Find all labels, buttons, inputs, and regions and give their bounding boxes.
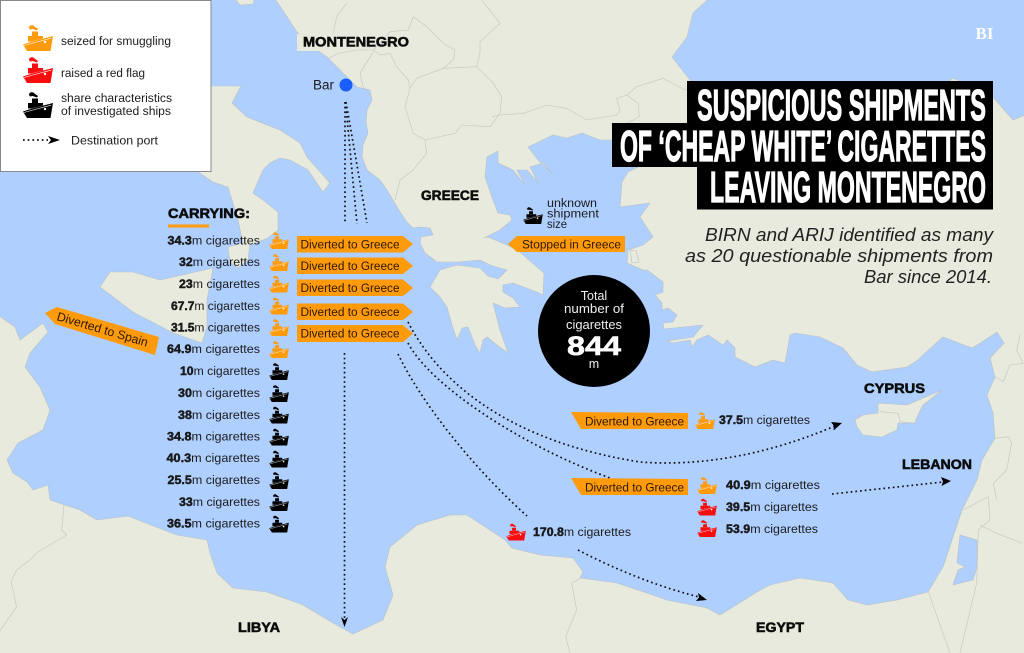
tag: stopped in Greece: Stopped in Greece	[522, 238, 621, 252]
arrow: to Lebanon	[832, 477, 951, 494]
land: Sicily	[100, 268, 213, 343]
total callout circle: Total	[581, 289, 607, 303]
legend: destination port arrow: Destination port	[71, 134, 159, 148]
lake: Dead Sea region	[953, 535, 977, 585]
list of cigarette quantities: 34.3m cigarettes	[168, 234, 260, 248]
icons: orange ships in list	[269, 232, 289, 358]
legend: seized for smuggling: seized for smuggling	[61, 34, 171, 48]
shipment: red ship near Libya: 170.8m cigarettes	[533, 525, 631, 539]
note: unknown shipment size	[523, 196, 600, 231]
total callout circle: 844	[567, 331, 621, 361]
total callout circle: cigarettes	[566, 318, 622, 332]
total callout circle	[538, 275, 650, 387]
country labels: GREECE	[421, 188, 479, 203]
list of cigarette quantities: 31.5m cigarettes	[171, 320, 260, 334]
land patch behind Montenegro label	[297, 34, 357, 51]
port marker: Bar: Bar	[313, 78, 334, 92]
list of cigarette quantities: 38m cigarettes	[178, 408, 260, 422]
land: Italy fragment at top	[232, 0, 256, 5]
tag: diverted to Spain: Diverted to Spain	[55, 309, 150, 350]
legend: seized for smuggling	[23, 25, 171, 51]
arrow: to Egypt	[578, 550, 707, 601]
note: unknown shipment size: unknown	[547, 196, 597, 210]
subtitle: BIRN and ARIJ identified as many	[705, 225, 994, 245]
country labels: LIBYA	[238, 620, 280, 635]
shipment group: to Lebanon	[571, 477, 820, 537]
tags: diverted to Greece stack: Diverted to Greece	[300, 326, 400, 340]
legend: raised a red flag: raised a red flag	[61, 66, 145, 80]
legend: share characteristics	[23, 91, 172, 118]
shipment group: to Lebanon: Diverted to Greece	[585, 480, 684, 494]
list of cigarette quantities	[166, 234, 260, 530]
list of cigarette quantities: 23m cigarettes	[179, 277, 260, 291]
country labels: LEBANON	[902, 457, 972, 472]
list of cigarette quantities: 25.5m cigarettes	[168, 473, 260, 487]
shipment group: to Cyprus: Diverted to Greece	[585, 414, 684, 428]
shipment group: to Lebanon: 53.9m cigarettes	[726, 522, 818, 536]
shipment group: to Cyprus: 37.5m cigarettes	[719, 413, 810, 427]
list of cigarette quantities: 34.8m cigarettes	[167, 430, 260, 444]
list of cigarette quantities: 30m cigarettes	[178, 386, 260, 400]
legend: destination port arrow	[23, 134, 159, 148]
list of cigarette quantities: 67.7m cigarettes	[171, 299, 260, 313]
list of cigarette quantities: 36.5m cigarettes	[167, 516, 260, 530]
legend: share characteristics: of investigated ships	[61, 104, 171, 118]
legend panel	[0, 0, 211, 172]
list of cigarette quantities: 33m cigarettes	[179, 495, 260, 509]
list of cigarette quantities: 64.9m cigarettes	[167, 342, 260, 356]
subtitle: Bar since 2014.	[864, 267, 992, 287]
title block	[612, 81, 993, 212]
carrying heading: CARRYING:	[168, 206, 250, 221]
shipment group: to Cyprus	[571, 412, 810, 429]
tag: diverted to Spain	[45, 307, 159, 355]
country borders: Middle East	[880, 335, 1023, 500]
list of cigarette quantities: 40.3m cigarettes	[166, 451, 260, 465]
country labels: MONTENEGRO	[303, 34, 409, 50]
tags: diverted to Greece stack	[297, 236, 413, 342]
land: Italy	[198, 86, 330, 268]
country labels: EGYPT	[756, 620, 805, 635]
route: to red ship	[398, 354, 527, 516]
port marker: Bar	[313, 78, 352, 92]
land: Cyprus	[855, 390, 942, 437]
dotted routes	[341, 102, 951, 627]
note: unknown shipment size: size	[547, 217, 567, 231]
legend: raised a red flag	[23, 57, 145, 83]
tags: diverted to Greece stack: Diverted to Greece	[300, 259, 400, 273]
subtitle: as 20 questionable shipments from	[685, 246, 993, 266]
shipment group: to Lebanon: 40.9m cigarettes	[726, 478, 820, 492]
country labels	[238, 34, 972, 635]
total callout circle: m	[589, 357, 599, 371]
land: Aegean island	[630, 250, 639, 263]
total callout circle: number of	[564, 302, 625, 316]
carrying heading	[168, 206, 250, 228]
tags: diverted to Greece stack: Diverted to Greece	[300, 238, 400, 252]
tags: diverted to Greece stack: Diverted to Greece	[300, 281, 400, 295]
list of cigarette quantities: 10m cigarettes	[180, 364, 260, 378]
country labels: CYPRUS	[864, 381, 925, 396]
list of cigarette quantities: 32m cigarettes	[179, 255, 260, 269]
shipment: red ship near Libya	[506, 524, 631, 540]
route: to second Greece tag	[408, 343, 610, 478]
icons: black ships in list	[269, 363, 289, 532]
tags: diverted to Greece stack: Diverted to Greece	[300, 305, 400, 319]
logo: BI: BI	[976, 24, 994, 43]
subtitle	[685, 225, 994, 287]
legend: share characteristics: share characteristics	[61, 91, 172, 105]
shipment group: to Lebanon: 39.5m cigarettes	[726, 500, 818, 514]
note: unknown shipment size: shipment	[547, 206, 600, 220]
country borders: Balkans	[328, 0, 705, 200]
arrow: to Libya	[341, 353, 348, 627]
arrow: to Cyprus	[408, 322, 842, 463]
